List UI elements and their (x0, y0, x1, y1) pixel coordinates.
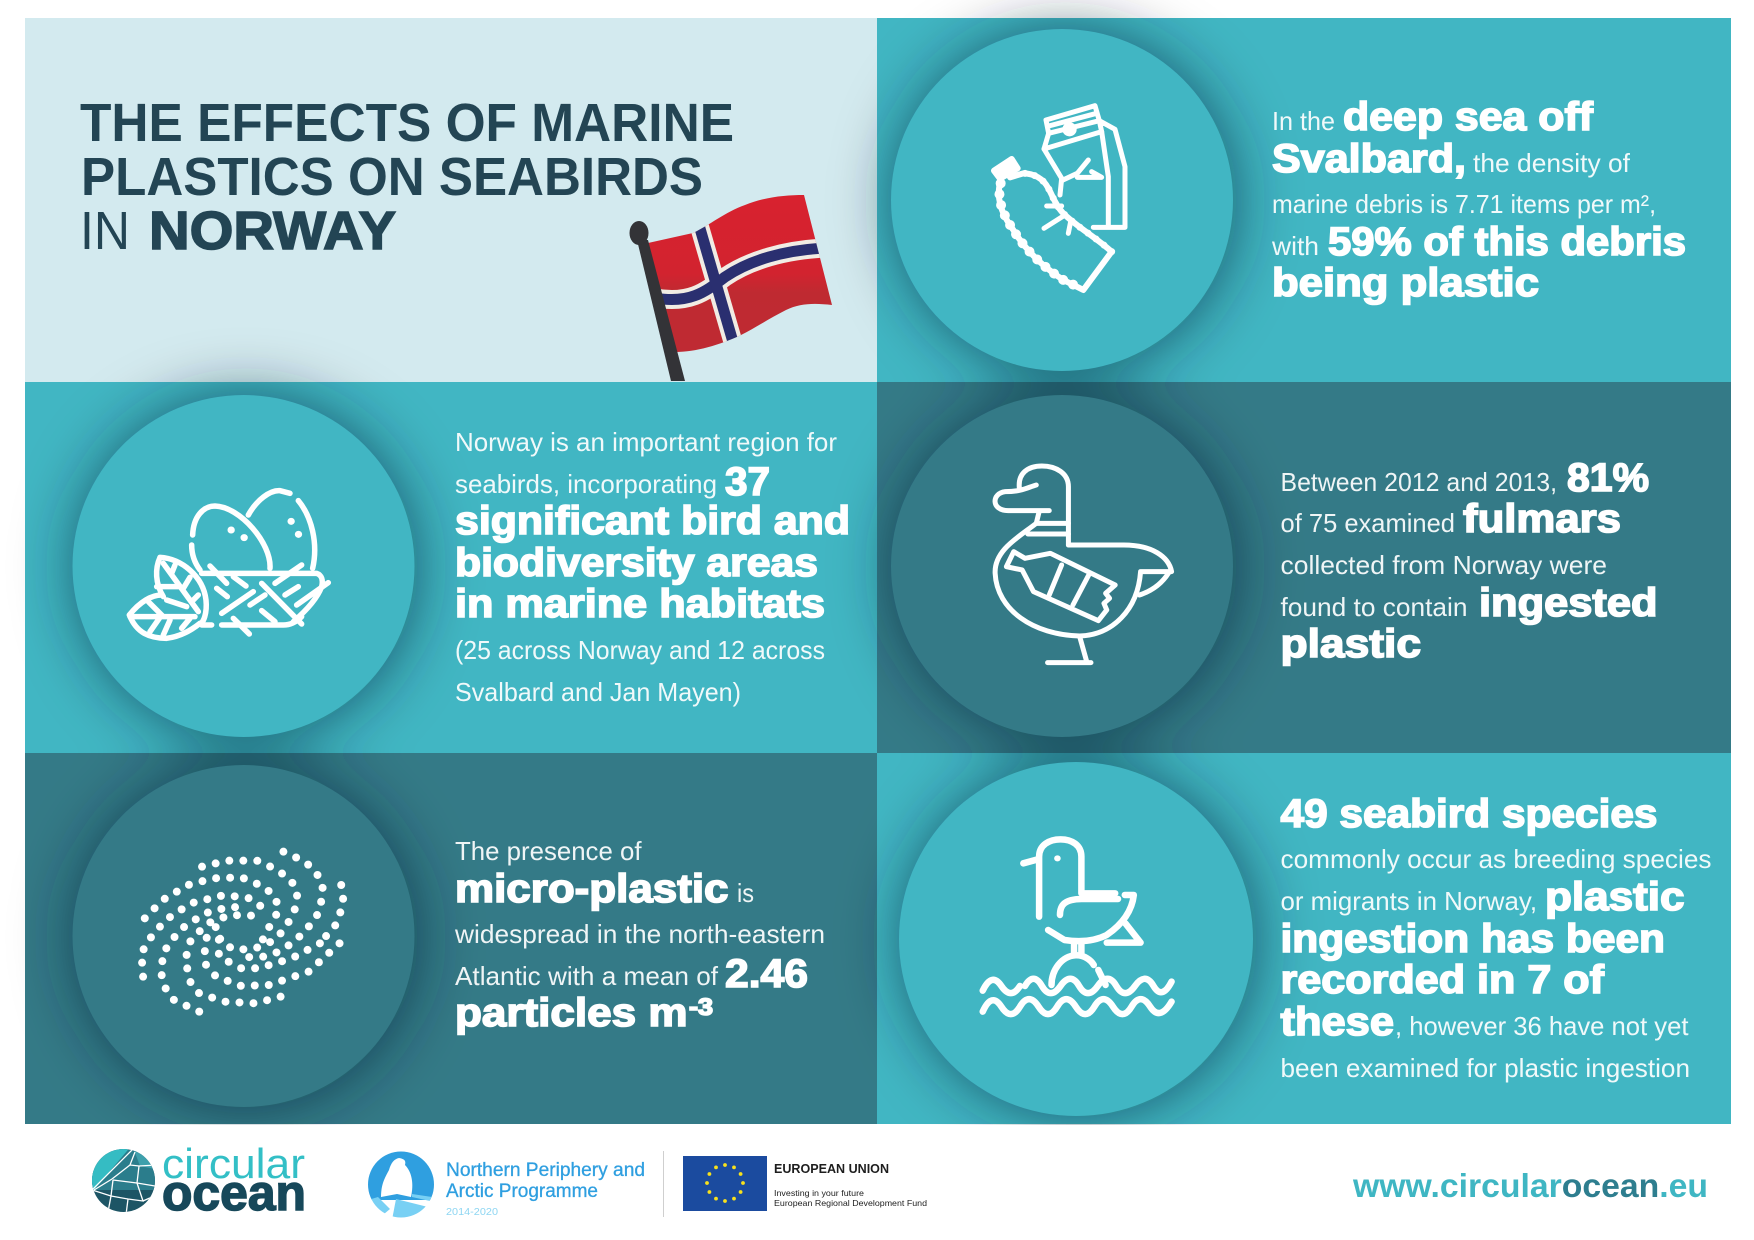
circle (891, 29, 1233, 371)
text block: ingestion has been (1280, 917, 1665, 961)
footer background (0, 1125, 1754, 1240)
text block: 81% (1567, 456, 1649, 500)
website URL: www.circularocean.eu (1352, 1167, 1708, 1204)
text block: is (737, 878, 754, 908)
logo: Circular Ocean: circular (162, 1140, 305, 1187)
text block: 59% of this debris (1328, 220, 1686, 264)
text block (1280, 792, 1712, 1083)
title heading: PLASTICS ON SEABIRDS (81, 147, 703, 207)
circle (891, 395, 1233, 737)
text block: recorded in 7 of (1280, 958, 1605, 1002)
text block: Svalbard and Jan Mayen) (455, 677, 741, 707)
logo: Northern Periphery and Arctic Programme: Arctic Programme (446, 1181, 598, 1202)
logo: Northern Periphery and Arctic Programme: Northern Periphery and (446, 1160, 645, 1181)
text block: Svalbard, (1272, 137, 1466, 181)
text block: found to contain (1280, 592, 1468, 622)
logo: European Union flag (683, 1156, 767, 1211)
circle drop shadows (74, 29, 1257, 1118)
text block: with (1271, 231, 1319, 261)
European Union text: Investing in your future (774, 1188, 864, 1198)
text block: Between 2012 and 2013, (1280, 467, 1557, 497)
icon: eggs in a nest with leaves (129, 491, 328, 638)
text block: fulmars (1463, 497, 1621, 541)
text block: (25 across Norway and 12 across (455, 635, 825, 665)
icon: seabird on a rock over waves (983, 839, 1172, 1014)
title heading: IN (80, 201, 130, 261)
text block: of 75 examined (1280, 508, 1455, 538)
text block: ingested (1479, 581, 1658, 625)
text block: The presence of (455, 836, 642, 866)
text block: 37 (725, 460, 770, 504)
European Union text: European Regional Development Fund (774, 1198, 927, 1208)
text block: the density of (1473, 148, 1631, 178)
text block: 49 seabird species (1280, 792, 1658, 836)
title heading: NORWAY (149, 201, 396, 261)
logo: Circular Ocean (92, 1148, 304, 1212)
text block: or migrants in Norway, (1280, 886, 1537, 916)
text block: 2.46 (725, 952, 808, 996)
panel: important region (72, 395, 850, 737)
text block: Atlantic with a mean of (455, 961, 719, 991)
text block: collected from Norway were (1280, 550, 1607, 580)
text block: seabirds, incorporating (455, 469, 717, 499)
text block (454, 836, 825, 1035)
European Union text (774, 1162, 927, 1208)
panel: deep sea debris (891, 29, 1686, 371)
logo: Circular Ocean: ocean (162, 1165, 306, 1221)
text block (1271, 95, 1686, 305)
text block: commonly occur as breeding species (1280, 844, 1712, 874)
European Union text: EUROPEAN UNION (774, 1162, 889, 1176)
text block: , however 36 have not yet (1395, 1011, 1689, 1041)
circle (72, 395, 414, 737)
text block: -3 (689, 994, 713, 1021)
text block: In the (1272, 106, 1335, 136)
title heading: THE EFFECTS OF MARINE (80, 93, 734, 153)
text block: plastic (1280, 622, 1421, 666)
logo: Northern Periphery and Arctic Programme: 2014-2020 (446, 1207, 498, 1218)
panel: fulmars (891, 395, 1658, 737)
circle (899, 762, 1253, 1116)
text block: significant bird and (455, 499, 850, 543)
text block: been examined for plastic ingestion (1280, 1053, 1690, 1083)
panel: title (80, 93, 832, 381)
footer (92, 1148, 1706, 1218)
icon: dotted plastic gyre spiral (141, 852, 343, 1012)
circle (72, 765, 414, 1107)
text block: marine debris is 7.71 items per m², (1272, 189, 1656, 219)
icon: duck with plastic bottle inside (995, 466, 1172, 663)
logo: Northern Periphery and Arctic Programme (366, 1150, 645, 1220)
text block: Norway is an important region for (455, 427, 837, 457)
text block: in marine habitats (455, 582, 825, 626)
text block: plastic (1545, 875, 1684, 919)
text block: widespread in the north-eastern (454, 919, 825, 949)
icon: milk carton and crushed bottle (994, 106, 1125, 290)
text block: particles m (455, 991, 688, 1035)
title heading (80, 93, 734, 261)
panel: micro-plastic (72, 765, 825, 1107)
text block: micro-plastic (455, 867, 728, 911)
text block: biodiversity areas (455, 541, 818, 585)
panel: seabird species (899, 762, 1712, 1116)
icon: Norwegian flag (630, 195, 832, 381)
text block (1280, 456, 1658, 666)
text block: deep sea off (1343, 95, 1594, 139)
text block: these (1280, 1000, 1394, 1044)
text block: being plastic (1272, 261, 1539, 305)
text block (455, 427, 850, 707)
